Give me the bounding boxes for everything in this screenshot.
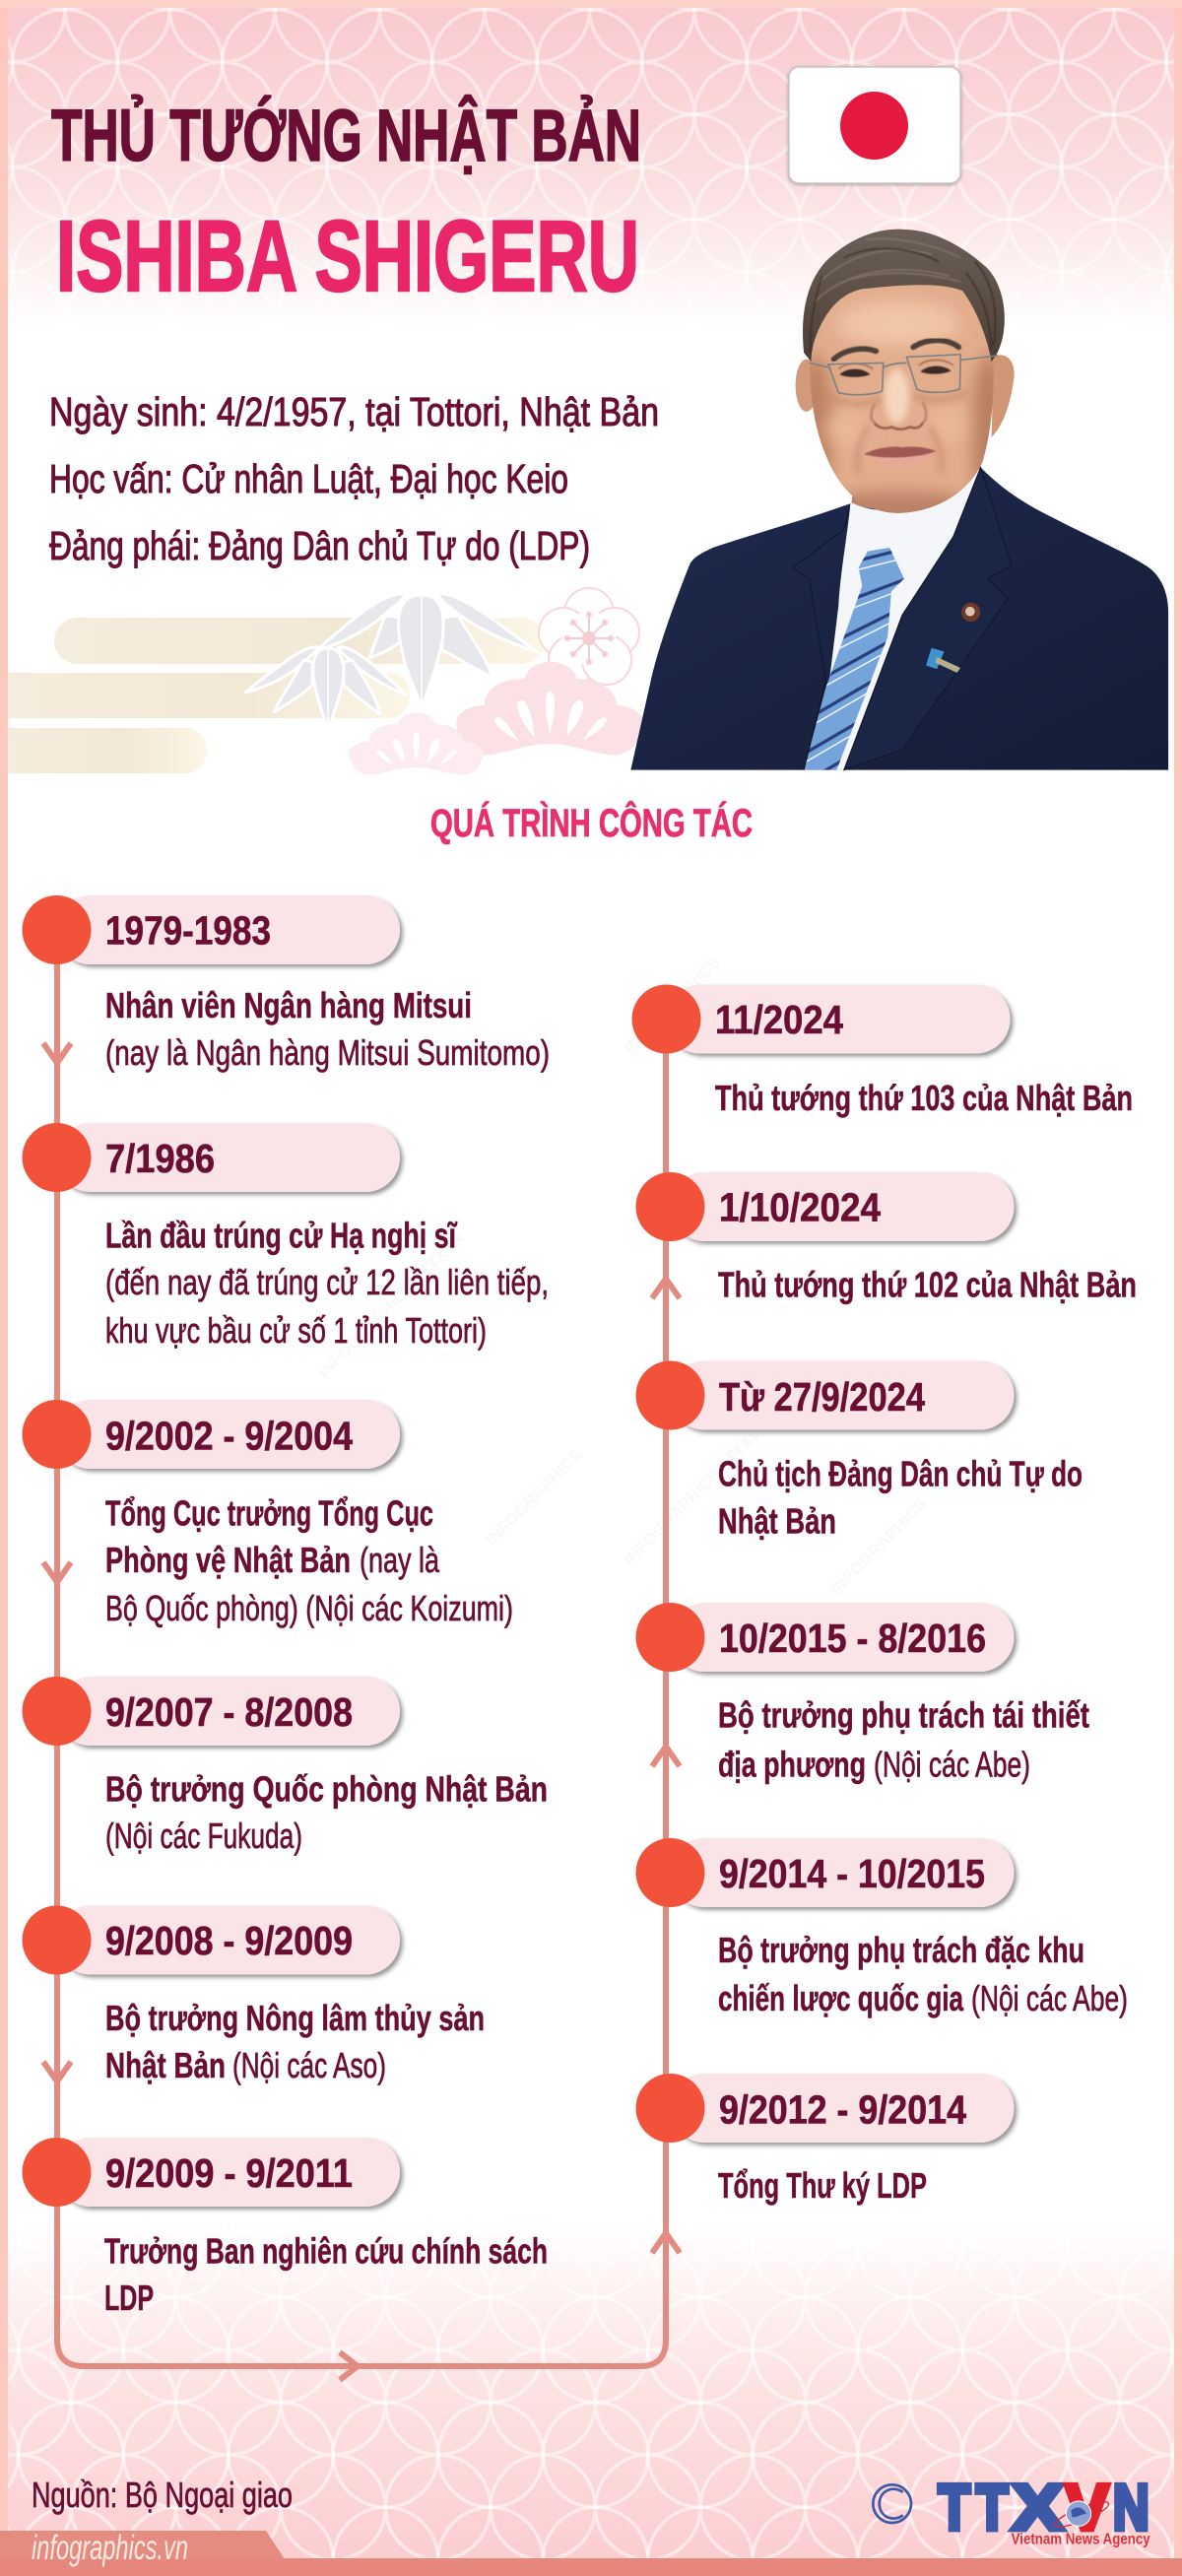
timeline entry: 9/2009 - 9/2011 <box>22 2138 548 2318</box>
hair <box>803 230 1005 362</box>
lapels <box>793 468 1012 770</box>
timeline entry: 9/2009 - 9/2011: 9/2009 - 9/2011 <box>105 2150 353 2196</box>
agency letters: T <box>939 2471 970 2543</box>
timeline entry: 10/2015 - 8/2016: địa phương <box>718 1744 866 1785</box>
timeline entry: 7/1986: khu vực bầu cử số 1 tỉnh Tottori) <box>105 1310 487 1351</box>
agency letters: T <box>976 2471 1008 2543</box>
watermarks: INFOGRAPHICS <box>482 1445 586 1550</box>
timeline entry: 9/2008 - 9/2009: Bộ trưởng Nông lâm thủy sản <box>105 1998 485 2038</box>
face <box>810 285 994 513</box>
arrow up 3 <box>652 1279 680 1298</box>
lapel pins <box>926 603 980 673</box>
arrow up 2 <box>652 1747 680 1766</box>
timeline entry: 9/2002 - 9/2004: 9/2002 - 9/2004 <box>105 1413 353 1458</box>
mouth <box>864 446 936 466</box>
personal info <box>49 389 659 568</box>
timeline entry: 9/2007 - 8/2008: 9/2007 - 8/2008 <box>105 1689 353 1735</box>
eyes <box>838 360 953 377</box>
timeline entry: 9/2009 - 9/2011: LDP <box>104 2278 154 2318</box>
watermarks: INFOGRAPHICS - TTXVN <box>620 1416 773 1569</box>
arrow down 3 <box>43 2062 71 2081</box>
timeline entry: 9/2014 - 10/2015: (Nội các Abe) <box>971 1978 1128 2018</box>
party: Đảng phái: Đảng Dân chủ Tự do (LDP) <box>49 523 590 568</box>
agency tagline: Vietnam News Agency <box>1012 2531 1150 2547</box>
timeline entry: 1979-1983 <box>22 895 550 1073</box>
agency letters <box>939 2471 1149 2543</box>
title: prime minister of Japan: THỦ TƯỚNG NHẬT BẢN <box>51 95 641 176</box>
timeline entry: 9/2002 - 9/2004: (nay là <box>360 1540 440 1580</box>
arrow down 2 <box>43 1562 71 1582</box>
education: Học vấn: Cử nhân Luật, Đại học Keio <box>49 456 568 501</box>
timeline entry: 9/2002 - 9/2004: Bộ Quốc phòng) (Nội các Koizumi) <box>105 1588 513 1628</box>
timeline entry: 9/2008 - 9/2009: 9/2008 - 9/2009 <box>105 1918 353 1963</box>
timeline entry: 11/2024: 11/2024 <box>715 997 843 1042</box>
timeline entry: 9/2007 - 8/2008 <box>22 1677 548 1856</box>
timeline entry: 9/2002 - 9/2004: Tổng Cục trưởng Tổng Cục <box>105 1493 433 1533</box>
timeline entry: 1/10/2024 <box>636 1172 1137 1304</box>
timeline entry: 9/2009 - 9/2011: Trưởng Ban nghiên cứu chính sách <box>104 2230 548 2272</box>
footer bar with site name <box>0 2529 1182 2576</box>
portrait of Ishiba Shigeru <box>630 230 1168 794</box>
agency letters: X <box>1013 2471 1063 2543</box>
necktie <box>804 548 904 770</box>
timeline entry: 9/2014 - 10/2015 <box>636 1838 1128 2018</box>
timeline entry: 1979-1983: 1979-1983 <box>105 908 271 954</box>
globe and orbit <box>1053 2497 1111 2532</box>
watermarks: INFOGRAPHICS - TTXVN <box>314 1228 468 1382</box>
timeline entry: 7/1986: (đến nay đã trúng cử 12 lần liên tiếp, <box>105 1262 549 1302</box>
timeline entry: 9/2012 - 9/2014: Tổng Thư ký LDP <box>718 2165 927 2206</box>
watermarks: INFOGRAPHICS <box>826 1494 931 1599</box>
timeline entry: 9/2008 - 9/2009: Nhật Bản <box>105 2045 226 2085</box>
copyright mark <box>873 2484 911 2523</box>
timeline entry: 1979-1983: Nhân viên Ngân hàng Mitsui <box>105 985 472 1025</box>
site name: infographics.vn <box>32 2529 188 2567</box>
timeline entry: 10/2015 - 8/2016: (Nội các Abe) <box>874 1744 1030 1785</box>
timeline entry: 9/2014 - 10/2015: chiến lược quốc gia <box>718 1978 964 2018</box>
timeline entry: 9/2007 - 8/2008: (Nội các Fukuda) <box>105 1816 302 1856</box>
timeline connector with arrows <box>43 930 680 2380</box>
timeline entry: 1/10/2024: 1/10/2024 <box>719 1184 881 1229</box>
title: name: ISHIBA SHIGERU <box>56 200 639 312</box>
timeline entry: 9/2012 - 9/2014 <box>636 2074 1015 2206</box>
source note: Nguồn: Bộ Ngoại giao <box>32 2475 293 2515</box>
timeline entry: from 27/9/2024 <box>636 1361 1083 1541</box>
timeline entry: 11/2024 <box>632 985 1133 1118</box>
section heading: QUÁ TRÌNH CÔNG TÁC <box>430 800 753 845</box>
timeline entry: 9/2002 - 9/2004: Phòng vệ Nhật Bản <box>105 1540 351 1580</box>
arrow up 1 <box>652 2233 680 2253</box>
arrow down 1 <box>43 1043 71 1063</box>
timeline entry: from 27/9/2024: Từ 27/9/2024 <box>719 1374 925 1420</box>
logo: copyright and TTXVN <box>873 2471 1150 2547</box>
arrow right <box>340 2352 358 2380</box>
timeline entry: 1979-1983: (nay là Ngân hàng Mitsui Sumitomo) <box>105 1032 550 1073</box>
decoration: clouds, bamboo, plum and pine <box>8 588 643 775</box>
icon: Japan flag <box>789 67 960 183</box>
timeline entry: 7/1986 <box>22 1123 549 1351</box>
watermarks: INFOGRAPHICS <box>620 953 724 1057</box>
timeline entry: 9/2007 - 8/2008: Bộ trưởng Quốc phòng Nhật Bản <box>105 1769 548 1809</box>
birth date: Ngày sinh: 4/2/1957, tại Tottori, Nhật Bản <box>49 389 659 434</box>
timeline entry: 10/2015 - 8/2016 <box>636 1603 1089 1785</box>
timeline entry: 7/1986: 7/1986 <box>105 1136 215 1181</box>
suit jacket <box>630 468 1168 770</box>
timeline entry: 7/1986: Lần đầu trúng cử Hạ nghị sĩ <box>105 1216 457 1255</box>
eyebrows <box>833 341 958 360</box>
timeline entry: 9/2012 - 9/2014: 9/2012 - 9/2014 <box>719 2086 966 2132</box>
timeline entry: 10/2015 - 8/2016: 10/2015 - 8/2016 <box>719 1616 986 1661</box>
neck <box>851 458 979 510</box>
ears <box>796 360 818 412</box>
timeline entry: 9/2008 - 9/2009: (Nội các Aso) <box>232 2045 386 2085</box>
timeline entry: 9/2008 - 9/2009 <box>22 1905 485 2085</box>
glasses <box>810 355 998 395</box>
watermarks <box>314 953 931 1599</box>
shirt <box>806 468 981 770</box>
agency letters: N <box>1113 2471 1149 2543</box>
agency letters: V <box>1066 2471 1108 2543</box>
nose <box>885 369 909 424</box>
timeline entry: from 27/9/2024: Nhật Bản <box>718 1501 836 1541</box>
timeline entry: 9/2002 - 9/2004 <box>22 1400 513 1628</box>
timeline entry: 9/2014 - 10/2015: 9/2014 - 10/2015 <box>719 1851 985 1896</box>
